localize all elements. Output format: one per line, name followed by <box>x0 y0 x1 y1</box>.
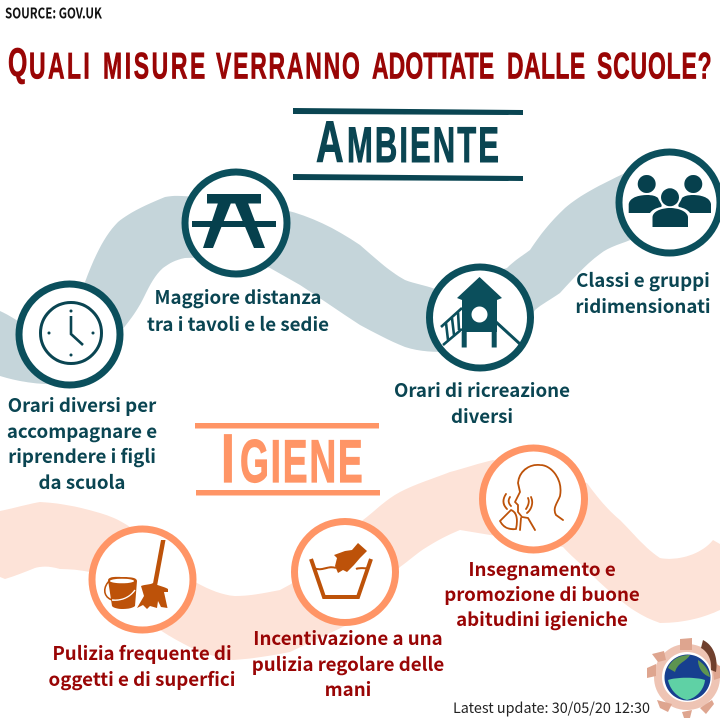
caption: staggered times <box>7 391 157 495</box>
caption: break times: diversi <box>451 402 513 429</box>
caption: hand washing: Incentivazione a una <box>253 624 443 651</box>
caption: hygiene habits: abitudini igieniche <box>456 605 628 632</box>
icon: clock <box>19 284 120 385</box>
title: Q <box>8 41 27 86</box>
icon: playground <box>430 267 530 368</box>
caption: hand washing: mani <box>325 675 371 702</box>
caption: cleaning <box>49 639 235 692</box>
icon: picnic table <box>185 172 287 274</box>
icon: globe with mask held by hands <box>647 638 720 718</box>
caption: break times: Orari di ricreazione <box>394 376 570 403</box>
caption: smaller classes: ridimensionati <box>575 292 711 319</box>
caption: staggered times: da scuola <box>39 468 125 495</box>
title: MISURE <box>103 45 205 87</box>
caption: staggered times: riprendere i figli <box>8 442 156 469</box>
title: DALLE <box>507 45 585 87</box>
caption: hand washing <box>252 624 444 702</box>
caption: table distance: Maggiore distanza <box>155 283 321 310</box>
source label: SOURCE: GOV.UK <box>5 2 103 24</box>
caption: hygiene habits <box>444 555 640 632</box>
caption: smaller classes <box>575 266 711 319</box>
heading: Igiene: GIENE <box>240 428 363 495</box>
caption: break times <box>394 376 570 429</box>
title: UALI <box>29 45 90 87</box>
caption: hygiene habits: Insegnamento e <box>468 555 616 582</box>
heading: Ambiente <box>293 108 523 181</box>
caption: cleaning: Pulizia frequente di <box>52 639 232 666</box>
caption: table distance: tra i tavoli e le sedie <box>147 310 329 337</box>
icon: group of people <box>619 152 720 253</box>
grey wavy band <box>0 173 640 384</box>
title: ADOTTATE <box>372 45 494 87</box>
peach wavy band <box>0 460 720 660</box>
update timestamp: Latest update: 30/05/20 12:30 <box>453 697 650 718</box>
caption: hygiene habits: promozione di buone <box>444 580 640 607</box>
caption: staggered times: accompagnare e <box>7 417 157 444</box>
icon: bucket and mop <box>92 529 193 630</box>
caption: cleaning: oggetti e di superfici <box>49 665 235 692</box>
heading: Ambiente: MBIENTE <box>347 116 499 173</box>
icon: washing hands <box>294 522 396 622</box>
title: SCUOLE? <box>597 45 712 87</box>
title <box>8 41 712 87</box>
title: VERRANNO <box>216 45 360 87</box>
heading: Igiene: I <box>221 420 235 497</box>
caption: hand washing: pulizia regolare delle <box>252 650 444 677</box>
caption: smaller classes: Classi e gruppi <box>576 266 710 293</box>
caption: staggered times: Orari diversi per <box>8 391 157 418</box>
heading: Igiene <box>195 420 380 497</box>
icon: person coughing <box>482 448 584 550</box>
heading: Ambiente: A <box>316 111 344 175</box>
caption: table distance <box>147 283 329 337</box>
